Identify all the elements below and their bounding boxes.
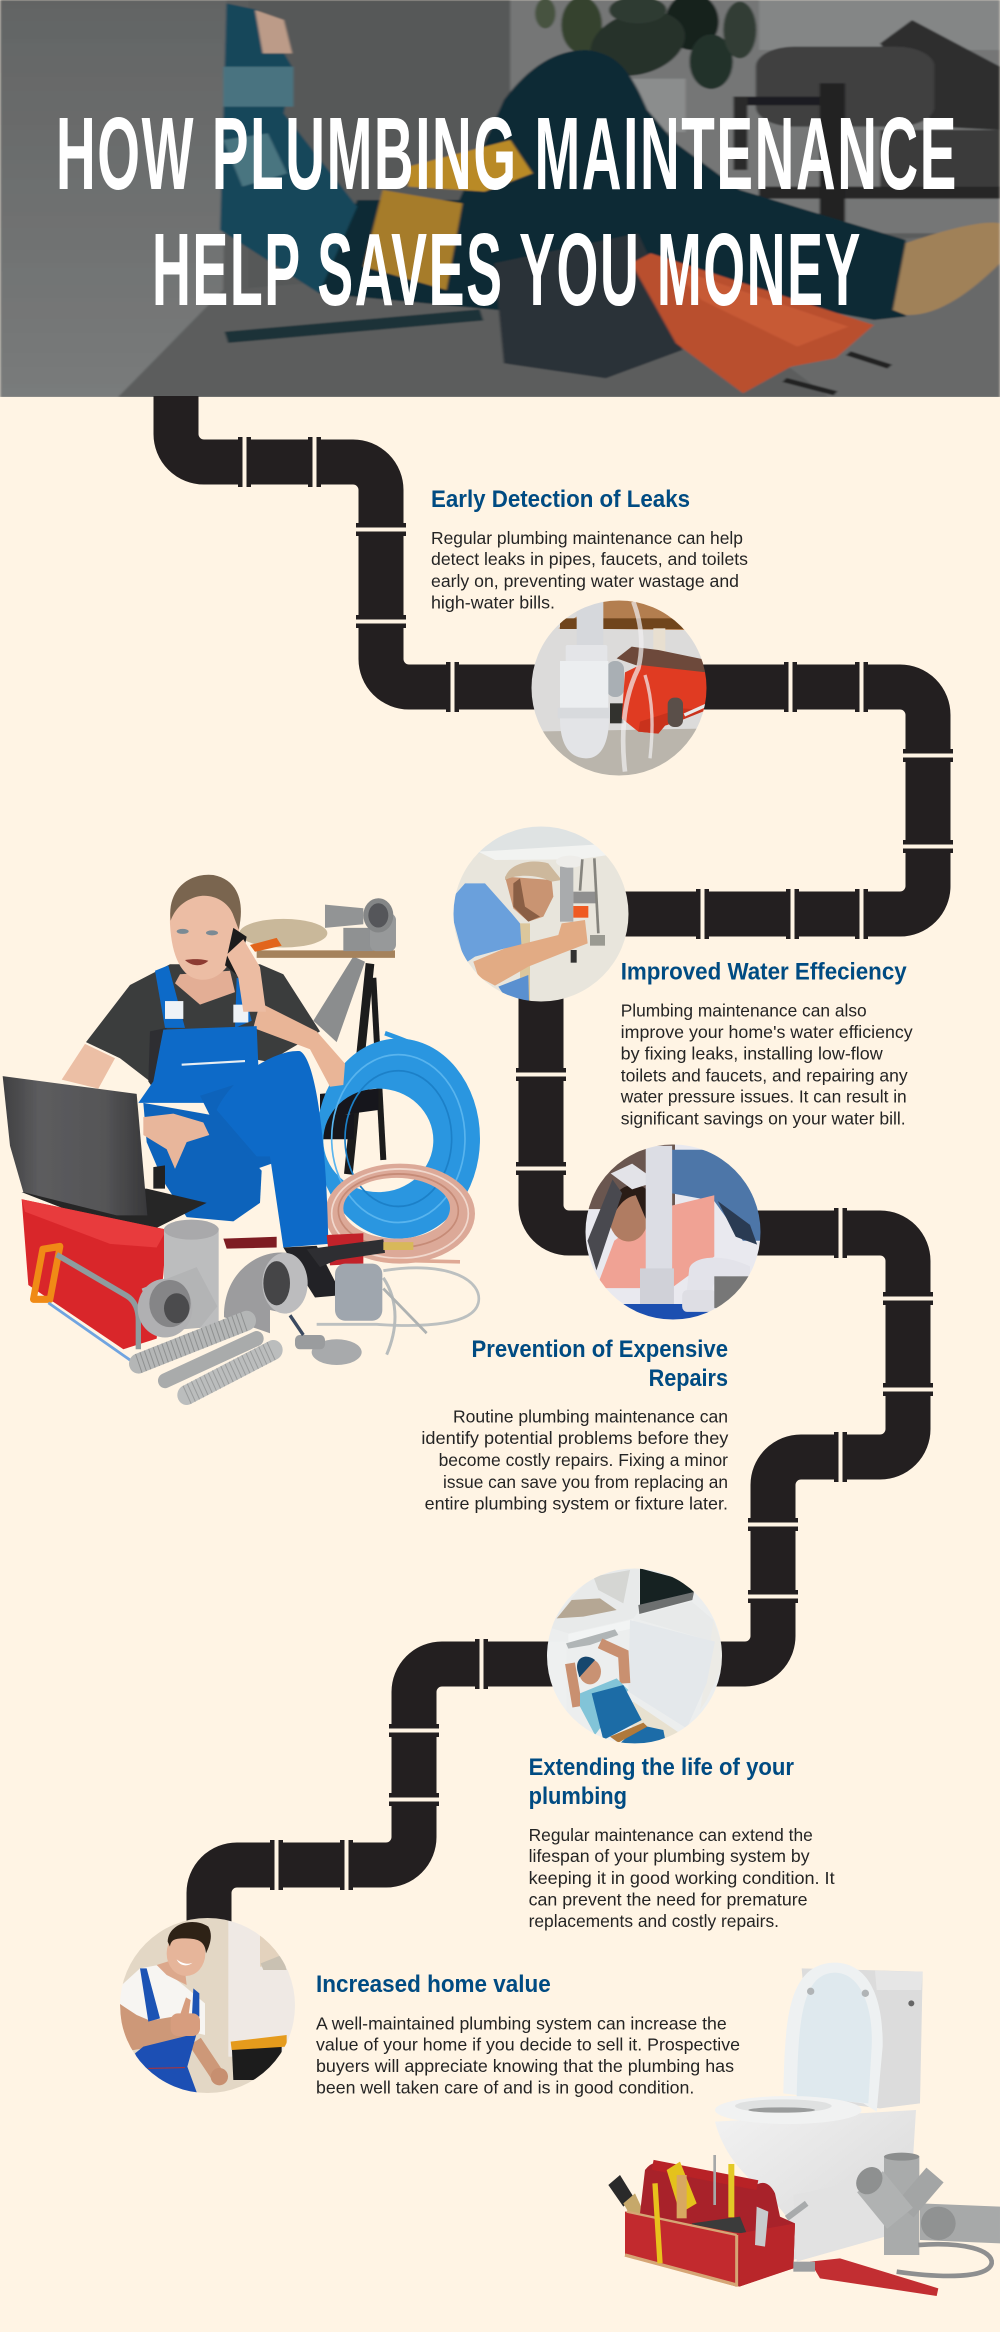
pipeline running down the page bbox=[176, 396, 955, 1960]
text block: improved water efficiency: Plumbing maintenance can also bbox=[621, 1001, 867, 1021]
text block: early detection bbox=[431, 528, 748, 612]
text block: extending the life: Regular maintenance can extend the bbox=[529, 1825, 813, 1845]
header photo: plumber lying on the floor bbox=[0, 0, 1000, 397]
heading: extending the life bbox=[529, 1754, 794, 1810]
text block: prevention of expensive repairs: become costly repairs. Fixing a minor bbox=[439, 1450, 728, 1470]
text block: prevention of expensive repairs: Routine plumbing maintenance can bbox=[453, 1407, 728, 1427]
text block: prevention of expensive repairs: entire plumbing system or fixture later. bbox=[425, 1494, 728, 1514]
panel: extending the life of your plumbing bbox=[529, 1560, 835, 1931]
text block: extending the life: can prevent the need for premature bbox=[529, 1890, 808, 1910]
text block: improved water efficiency: toilets and faucets, and repairing any bbox=[621, 1065, 908, 1085]
text block: early detection: high-water bills. bbox=[431, 592, 555, 612]
heading: early detection: Early Detection of Leaks bbox=[431, 486, 690, 513]
text block: improved water efficiency bbox=[620, 1001, 913, 1128]
text block: increased home value: been well taken care of and is in good condition. bbox=[316, 2077, 694, 2097]
text block: prevention of expensive repairs bbox=[421, 1407, 729, 1514]
panel: improved water efficiency bbox=[445, 820, 913, 1128]
text block: extending the life bbox=[529, 1825, 835, 1931]
photo: woman checking a leaking pipe bbox=[582, 1142, 764, 1324]
text block: increased home value bbox=[316, 2013, 740, 2097]
photo: plumber under a sink bbox=[454, 826, 628, 1002]
text block: early detection: detect leaks in pipes, faucets, and toilets bbox=[431, 549, 748, 569]
text block: increased home value: A well-maintained plumbing system can increase the bbox=[316, 2013, 727, 2033]
photo: smiling plumber with thumbs up bbox=[117, 1917, 300, 2097]
text block: improved water efficiency: significant savings on your water bill. bbox=[621, 1108, 906, 1128]
heading: prevention of expensive repairs: Repairs bbox=[649, 1365, 728, 1392]
panel: early detection of leaks bbox=[431, 486, 748, 785]
panel: increased home value bbox=[117, 1917, 740, 2097]
text block: increased home value: buyers will appreciate knowing that the plumbing has bbox=[316, 2056, 734, 2076]
illustration: toilet, toolbox, pipes and wrench bbox=[608, 1963, 1000, 2296]
heading: improved water efficiency: Improved Water Effeciency bbox=[621, 958, 907, 986]
text block: improved water efficiency: improve your home's water efficiency bbox=[621, 1022, 913, 1042]
heading: increased home value: Increased home value bbox=[316, 1971, 551, 1998]
heading: prevention of expensive repairs bbox=[472, 1336, 728, 1392]
text block: extending the life: lifespan of your plumbing system by bbox=[529, 1846, 810, 1866]
illustration: female plumber with laptop, pipes and tools bbox=[3, 875, 480, 1395]
text block: increased home value: value of your home if you decide to sell it. Prospective bbox=[316, 2035, 740, 2055]
heading: extending the life: plumbing bbox=[529, 1783, 627, 1810]
text block: prevention of expensive repairs: identify potential problems before they bbox=[421, 1428, 729, 1448]
text block: improved water efficiency: by fixing leaks, installing low-flow bbox=[621, 1044, 883, 1064]
title bbox=[56, 96, 958, 327]
text block: extending the life: replacements and costly repairs. bbox=[529, 1911, 779, 1931]
heading: extending the life: Extending the life of your bbox=[529, 1754, 794, 1781]
text block: early detection: early on, preventing water wastage and bbox=[431, 571, 739, 591]
photo: plumber lying under kitchen sink bbox=[547, 1568, 722, 1744]
panel: prevention of expensive repairs bbox=[421, 1142, 764, 1514]
text block: prevention of expensive repairs: issue can save you from replacing an bbox=[443, 1472, 728, 1492]
text block: early detection: Regular plumbing maintenance can help bbox=[431, 528, 743, 548]
text block: extending the life: keeping it in good working condition. It bbox=[529, 1868, 835, 1888]
heading: prevention of expensive repairs: Prevention of Expensive bbox=[472, 1336, 728, 1363]
photo: leaking pipe and red wrench bbox=[532, 600, 706, 776]
text block: improved water efficiency: water pressure issues. It can result in bbox=[620, 1087, 907, 1107]
